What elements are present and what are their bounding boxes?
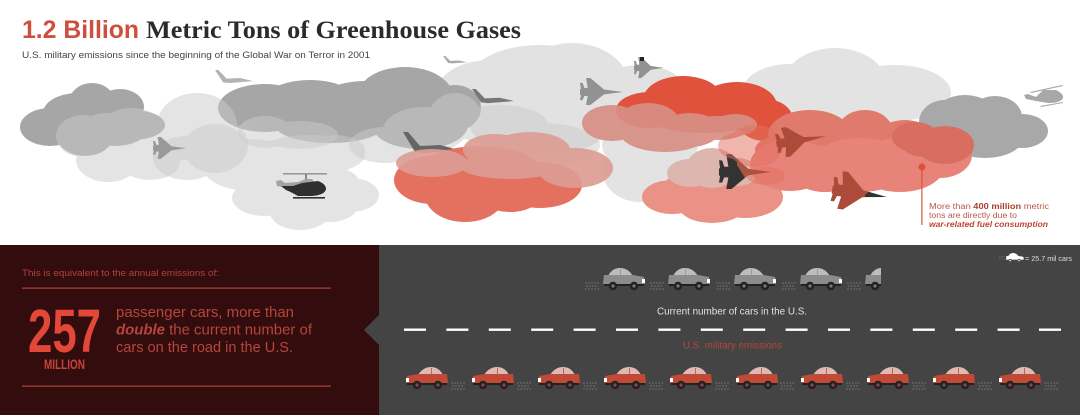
cloud: coral mid right lower — [750, 132, 972, 192]
cloud: light helicopter cloud — [232, 158, 379, 230]
cloud: light pink lower right — [642, 167, 783, 223]
title — [22, 16, 521, 44]
big number: 257 — [28, 297, 101, 365]
white background — [0, 0, 1080, 245]
divider bottom — [22, 386, 331, 387]
cloud: translucent light left over dark — [56, 93, 248, 182]
jet: pale gray small top — [443, 56, 467, 63]
cloud: red mid right — [755, 110, 937, 166]
helicopter: right gray — [1024, 85, 1063, 107]
callout text — [929, 201, 1050, 229]
cloud: darker coral right — [892, 122, 974, 164]
row: gray cars — [585, 268, 907, 290]
callout marker — [918, 163, 926, 225]
jet: tinted overlap on dark jet — [737, 159, 770, 178]
callout text: More than 400 million metric — [929, 201, 1050, 211]
legend: car scale — [999, 253, 1072, 263]
cloud: light gray right top — [742, 48, 951, 129]
jet: tinted overlap lower right — [830, 171, 869, 210]
label: current cars: Current number of cars in the U.S. — [657, 306, 807, 318]
callout text: tons are directly due to — [929, 210, 1017, 220]
jet: dark lower right — [830, 170, 889, 215]
cloud: translucent coral lens — [718, 125, 785, 185]
road centre dashes — [404, 328, 1061, 331]
paragraph: cars on the road in the U.S. — [116, 340, 293, 356]
jet: dark under cloud — [719, 154, 771, 189]
title: Metric Tons of Greenhouse Gases — [146, 17, 521, 44]
cloud: pale top lobe — [667, 148, 758, 188]
subtitle: U.S. military emissions since the beginning of the Global War on Terror in 2001 — [22, 50, 370, 61]
panel: road — [379, 245, 1080, 415]
cloud: red lower left — [394, 146, 582, 222]
paragraph — [116, 305, 313, 356]
cloud: dark gray centre — [218, 67, 481, 149]
cloud: dark gray left — [20, 83, 165, 156]
cloud: translucent light over dark centre — [238, 93, 600, 167]
cloud: dark gray right — [919, 95, 1048, 158]
jet: gray mid upper — [472, 89, 514, 103]
million label: MILLION — [44, 356, 85, 372]
callout text: war-related fuel consumption — [929, 219, 1048, 229]
jet: gray left — [153, 137, 186, 159]
cloud: light gray lower centre — [602, 117, 698, 202]
jet: tinted upper right — [774, 121, 828, 158]
panel: equivalent emissions — [0, 245, 379, 415]
cloud: pink over red lower left — [396, 132, 613, 188]
paragraph: double the current number of — [116, 322, 313, 338]
jet: pale gray top left — [215, 70, 253, 83]
label: military emissions: U.S. military emissions — [683, 340, 782, 352]
title: 1.2 Billion — [22, 16, 139, 44]
notch arrow — [364, 315, 379, 345]
cloud: bright red top — [616, 76, 793, 141]
helicopter: centre — [276, 173, 327, 199]
paragraph: passenger cars, more than — [116, 305, 294, 321]
panel intro text: This is equivalent to the annual emissions of: — [22, 268, 219, 279]
jet: gray small top right — [634, 57, 664, 78]
divider top — [22, 288, 331, 289]
legend: car scale: = 25.7 mil cars — [1025, 254, 1072, 263]
cloud: light gray centre top — [437, 43, 688, 155]
row: red cars — [406, 367, 1058, 390]
jet: dark gray centre — [403, 132, 459, 153]
cloud: salmon over gray and red — [582, 103, 757, 152]
jet: gray large top — [580, 78, 623, 105]
cloud: translucent light middle band — [153, 124, 365, 191]
